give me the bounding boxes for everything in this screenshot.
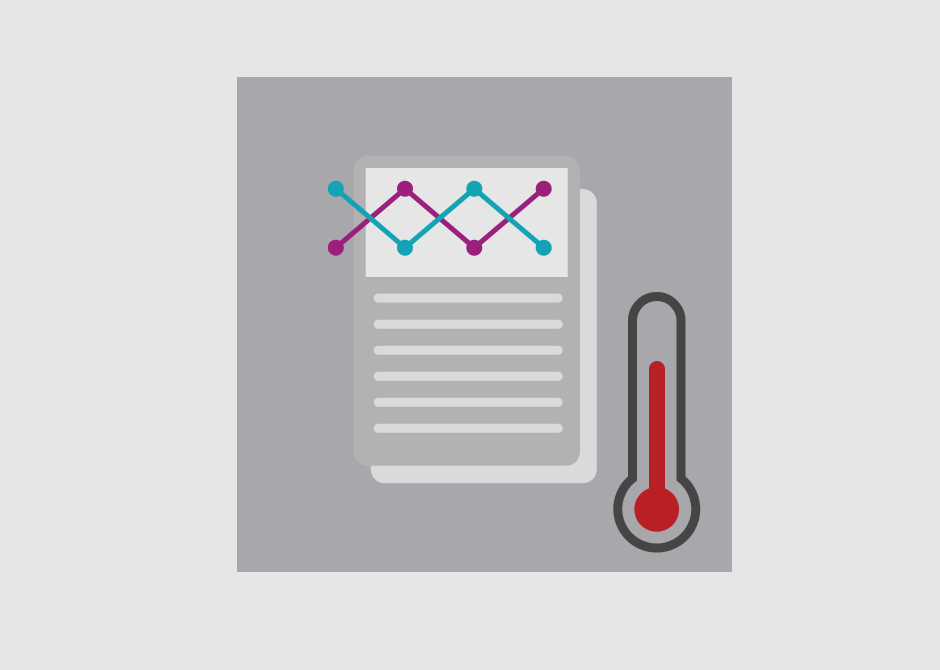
thermometer body [618,297,696,548]
icon: front document sheet [354,156,580,466]
line chart: crossing series [328,181,552,256]
icon: thermometer [618,297,696,548]
chart area panel [366,168,568,277]
series: teal line [328,181,552,256]
panel: grey square background [237,77,732,572]
thermometer mercury column [649,361,665,501]
text lines [374,294,563,433]
series: purple line [328,181,552,256]
thermometer bulb [634,487,679,532]
icon: back document sheet [371,189,597,483]
